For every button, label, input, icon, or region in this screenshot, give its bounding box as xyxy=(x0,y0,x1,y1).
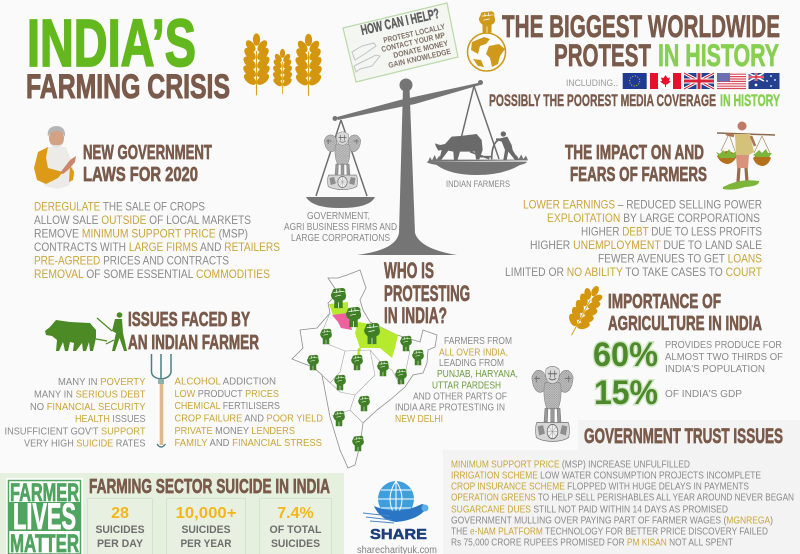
stat: suicides per year: 10,000+ xyxy=(176,505,236,522)
heading: issues faced: AN INDIAN FARMER xyxy=(128,331,259,354)
heading: issues faced: ISSUES FACED BY xyxy=(128,308,250,331)
flags xyxy=(623,73,780,89)
list: law changes xyxy=(34,200,280,281)
list: right issues xyxy=(174,376,323,449)
heading: biggest worldwide protest: PROTEST xyxy=(554,37,651,73)
list: law changes: CONTRACTS WITH LARGE FIRMS AND RETAILERS xyxy=(34,240,280,254)
list: trust issues: MINIMUM SUPPORT PRICE (MSP) INCREASE UNFULFILLED xyxy=(451,460,690,470)
protest fists xyxy=(307,288,424,451)
stat: 60 percent xyxy=(593,336,783,375)
label: government: AGRI BUSINESS FIRMS AND xyxy=(284,222,397,233)
state borders xyxy=(322,313,410,423)
text: who is protesting description: NEW DELHI xyxy=(395,414,443,425)
list: impacts: FEWER AVENUES TO GET LOANS xyxy=(598,252,762,266)
panel background xyxy=(0,473,344,554)
label: Indian farmers: INDIAN FARMERS xyxy=(446,179,510,190)
list: left issues: NO FINANCIAL SECURITY xyxy=(30,401,146,413)
heading: issues faced xyxy=(128,308,259,354)
heading: impact and fears: FEARS OF FARMERS xyxy=(570,163,707,186)
heading: who is protesting: PROTESTING xyxy=(384,281,470,306)
right pan: farmers xyxy=(427,86,528,175)
scale stand and beam xyxy=(332,78,483,255)
flag: UK xyxy=(684,73,714,89)
text: who is protesting description: FARMERS FROM xyxy=(444,336,512,347)
text: who is protesting description: LEADING FROM xyxy=(439,358,504,369)
panel: importance of agriculture xyxy=(559,280,783,412)
heading: impact and fears: THE IMPACT ON AND xyxy=(565,141,704,164)
panel: how can I help: PROTEST LOCALLY xyxy=(382,22,446,45)
logo: share charity xyxy=(357,481,437,554)
stat: 15 percent xyxy=(594,374,742,412)
state: Uttar Pradesh xyxy=(355,322,398,358)
stat: suicides per day: 28 xyxy=(111,505,129,522)
list: left issues: VERY HIGH SUICIDE RATES xyxy=(24,438,146,450)
stat: 60 percent: INDIA'S POPULATION xyxy=(665,363,765,375)
list: trust issues: GOVERNMENT MULLING OVER PAYING PART OF FARMER WAGES (MGNREGA) xyxy=(451,516,773,526)
list: right issues: CHEMICAL FERTILISERS xyxy=(174,400,280,412)
heading: who is protesting: WHO IS xyxy=(384,258,434,283)
text: who is protesting description xyxy=(395,336,518,425)
flag: USA xyxy=(717,73,746,89)
including label: INCLUDING.. xyxy=(566,78,618,89)
panel: impact on farmers xyxy=(505,122,775,279)
state: Punjab xyxy=(329,302,348,315)
title: India's farming crisis: INDIA’S xyxy=(27,6,196,81)
list: trust issues: CROP INSURANCE SCHEME FLOPPED WITH HUGE DELAYS IN PAYMENTS xyxy=(451,482,749,492)
heading: new government laws xyxy=(83,141,212,186)
heading: impact and fears xyxy=(565,141,707,186)
stat: percent of total suicides xyxy=(260,498,332,554)
list: right issues: PRIVATE MONEY LENDERS xyxy=(174,425,295,437)
list: left issues xyxy=(4,376,146,450)
title: India's farming crisis xyxy=(26,6,230,106)
flag: EU xyxy=(623,73,647,89)
list: right issues: CROP FAILURE AND POOR YIELD xyxy=(174,412,323,424)
list: right issues: FAMILY AND FINANCIAL STRESS xyxy=(174,437,322,449)
list: impacts xyxy=(505,198,763,279)
list: left issues: HEALTH ISSUES xyxy=(75,413,146,425)
panel: how can I help: DONATE MONEY xyxy=(392,38,450,60)
list: law changes: ALLOW SALE OUTSIDE OF LOCAL MARKETS xyxy=(34,213,251,227)
stat: 60 percent: PROVIDES PRODUCE FOR xyxy=(665,339,782,351)
stat: suicides per day: SUICIDES xyxy=(96,524,144,536)
list: impacts: LIMITED OR NO ABILITY TO TAKE CASES TO COURT xyxy=(505,265,763,279)
icon: oxen and ploughing farmer xyxy=(45,312,127,351)
heading: who is protesting xyxy=(384,258,470,328)
panel: how can I help xyxy=(343,3,458,82)
heading: importance: IMPORTANCE OF xyxy=(608,290,721,313)
label: government: LARGE CORPORATIONS xyxy=(291,233,390,244)
text: who is protesting description: AND OTHER PARTS OF xyxy=(413,392,507,402)
list: impacts: HIGHER UNEMPLOYMENT DUE TO LAND SALE xyxy=(530,238,762,252)
stat: suicides per year xyxy=(166,498,246,554)
list: law changes: REMOVAL OF SOME ESSENTIAL COMMODITIES xyxy=(34,267,270,281)
panel: government trust issues xyxy=(443,366,800,554)
list: impacts: LOWER EARNINGS – REDUCED SELLING POWER xyxy=(523,198,762,212)
list: trust issues: SUGARCANE DUES STILL NOT PAID WITHIN 14 DAYS AS PROMISED xyxy=(451,504,728,516)
map outline xyxy=(292,270,437,468)
label: government: GOVERNMENT, xyxy=(307,211,370,222)
heading: new government laws: NEW GOVERNMENT xyxy=(83,141,212,164)
badge: farmer lives matter: LIVES xyxy=(13,496,76,537)
title: India's farming crisis: FARMING CRISIS xyxy=(26,68,230,106)
state: Haryana xyxy=(332,313,352,330)
panel: how can I help: GAIN KNOWLEDGE xyxy=(387,47,452,70)
text: who is protesting description: PUNJAB, HARYANA, xyxy=(437,369,518,380)
left pan: government xyxy=(306,120,375,208)
logo: share charity: SHARE xyxy=(370,526,427,543)
icon: national emblem xyxy=(532,366,573,441)
ploughing farmer xyxy=(501,131,506,137)
ox silhouette xyxy=(435,134,483,161)
stat: suicides per day xyxy=(88,498,152,554)
heading: who is protesting: IN INDIA? xyxy=(384,303,447,328)
chart: balance scale xyxy=(284,78,528,255)
heading: importance xyxy=(608,290,762,335)
flag: Australia xyxy=(748,73,780,89)
heading: biggest worldwide protest xyxy=(502,8,780,73)
stat: suicides per day: PER DAY xyxy=(97,538,144,550)
list: trust issues: IRRIGATION SCHEME LOW WATER CONSUMPTION PROJECTS INCOMPLETE xyxy=(451,470,761,482)
badge: farmer lives matter xyxy=(6,478,83,554)
pan and grass xyxy=(427,154,528,175)
list: left issues: MANY IN POVERTY xyxy=(58,376,146,388)
stat: 60 percent: 60% xyxy=(593,336,658,374)
heading: new government laws: LAWS FOR 2020 xyxy=(83,163,198,186)
panel background xyxy=(443,420,800,554)
stat: 60 percent: ALMOST TWO THIRDS OF xyxy=(665,351,783,363)
flag: Canada xyxy=(650,73,681,89)
badge: farmer lives matter: FARMER xyxy=(10,479,79,507)
text: who is protesting description: UTTAR PARDESH xyxy=(432,380,501,392)
map: protests across India xyxy=(292,270,437,468)
list: right issues: ALCOHOL ADDICTION xyxy=(174,376,276,388)
stat: percent of total suicides: SUICIDES xyxy=(271,538,320,550)
text: who is protesting description: INDIA ARE PROTESTING IN xyxy=(395,402,505,414)
list: impacts: EXPLOITATION BY LARGE CORPORATIONS xyxy=(547,211,760,225)
stat: percent of total suicides: OF TOTAL xyxy=(270,524,322,536)
label: government xyxy=(284,211,397,244)
stat: percent of total suicides: 7.4% xyxy=(277,505,314,522)
list: law changes: PRE-AGREED PRICES AND CONTRACTS xyxy=(34,254,229,268)
list: trust issues: Rs 75,000 CRORE RUPEES PROMISED FOR PM KISAN NOT ALL SPENT xyxy=(451,538,733,548)
list: law changes: DEREGULATE THE SALE OF CROPS xyxy=(34,200,205,214)
list: trust issues xyxy=(451,460,794,548)
heading: farming sector suicide: FARMING SECTOR SUICIDE IN INDIA xyxy=(89,475,330,498)
stat: 15 percent: 15% xyxy=(594,374,658,412)
list: right issues: LOW PRODUCT PRICES xyxy=(174,388,279,400)
stat: suicides per year: SUICIDES xyxy=(182,524,230,536)
icon: pitchfork xyxy=(152,354,171,447)
panel: farming sector suicide xyxy=(0,473,344,554)
icon: Modi portrait xyxy=(34,126,76,189)
panel: new government laws xyxy=(34,126,280,281)
list: left issues: MANY IN SERIOUS DEBT xyxy=(34,388,146,400)
icon: fist over globe xyxy=(468,11,506,71)
icon: wheat ear xyxy=(559,280,610,342)
panel: issues faced by farmers xyxy=(4,308,323,450)
icon: three wheat stalks xyxy=(241,33,324,96)
list: left issues: INSUFFICIENT GOV'T SUPPORT xyxy=(4,426,146,438)
stat: 15 percent: OF INDIA'S GDP xyxy=(665,388,742,400)
list: impacts: HIGHER DEBT DUE TO LESS PROFITS xyxy=(581,224,762,238)
list: law changes: REMOVE MINIMUM SUPPORT PRICE (MSP) xyxy=(34,226,248,240)
icon: farmer carrying baskets xyxy=(716,122,775,190)
text: who is protesting description: ALL OVER INDIA, xyxy=(439,348,508,358)
panel: how can I help: CONTACT YOUR MP xyxy=(380,31,446,54)
stat: suicides per year: PER YEAR xyxy=(180,538,232,550)
